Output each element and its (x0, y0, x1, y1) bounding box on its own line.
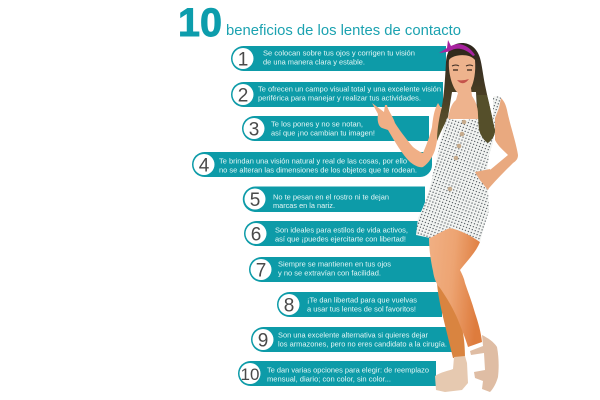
benefit 3 (242, 116, 429, 141)
polka dot romper (416, 96, 501, 242)
benefit 4: 4 (199, 156, 210, 176)
benefit 5: marcas en la nariz. (273, 201, 335, 210)
benefit 8: a usar tus lentes de sol favoritos! (307, 304, 416, 314)
benefit 5: No te pesan en el rostro ni te dejan (273, 192, 389, 202)
benefit 10 (238, 361, 436, 386)
benefit 9: 9 (258, 330, 268, 352)
back leg (437, 283, 465, 358)
benefit 7: Siempre se mantienen en tus ojos (278, 260, 391, 268)
benefit 4 (192, 152, 432, 177)
benefit 8: ¡Te dan libertad para que vuelvas (307, 296, 417, 304)
hair (437, 43, 495, 143)
benefit 2: periférica para manejar y realizar tus actividades. (258, 94, 421, 102)
benefit 3: 3 (249, 120, 259, 140)
front leg (429, 228, 482, 347)
face, neck and chest (448, 55, 479, 119)
benefit 4: no se alteran las dimensiones de los objetos que te rodean. (219, 166, 417, 174)
woman pointing at the list (372, 40, 518, 392)
benefit 6: así que ¡puedes ejercitarte con libertad! (275, 234, 406, 244)
buttons and belt (448, 120, 466, 191)
title (178, 1, 461, 45)
benefit 6 (244, 221, 431, 246)
benefit 2: Te ofrecen un campo visual total y una excelente visión (258, 84, 441, 94)
title: beneficios de los lentes de contacto (226, 22, 461, 39)
hair strands over dress (477, 95, 495, 143)
benefit 7 (249, 257, 436, 282)
benefit 2 (231, 82, 443, 107)
purple headband (439, 40, 475, 56)
benefit 1 (231, 46, 446, 71)
benefit 10: 10 (241, 365, 259, 384)
left shoe (435, 356, 468, 392)
benefit 1: de una manera clara y estable. (263, 58, 365, 66)
benefit 7: 7 (256, 260, 266, 282)
title: 10 (178, 1, 222, 45)
right arm (475, 97, 518, 190)
benefit 9 (251, 327, 453, 352)
eyes and smile (452, 65, 473, 83)
benefit 10: Te dan varias opciones para elegir: de reemplazo (267, 366, 429, 374)
benefit 2: 2 (238, 86, 248, 106)
benefit 9: Son una excelente alternativa si quieres dejar (278, 330, 429, 340)
pointing arm (372, 103, 445, 167)
benefit 5: 5 (250, 190, 260, 211)
benefit 8 (277, 292, 442, 317)
benefit 6: 6 (251, 224, 261, 246)
hand in pocket (475, 169, 494, 190)
benefit 4: Te brindan una visión natural y real de las cosas, por ello (219, 156, 407, 166)
benefit 9: los armazones, pero no eres candidato a la cirugía. (278, 340, 447, 348)
benefit 3: así que ¡no cambian tu imagen! (271, 128, 375, 138)
benefit 7: y no se extravían con facilidad. (278, 268, 381, 278)
right shoe (470, 335, 499, 392)
benefit 6: Son ideales para estilos de vida activos, (275, 226, 408, 234)
benefit 3: Te los pones y no se notan, (271, 120, 363, 128)
benefit 10: mensual, diario; con color, sin color... (267, 374, 391, 384)
benefit 1: Se colocan sobre tus ojos y corrigen tu visión (263, 48, 415, 58)
benefit 1: 1 (238, 50, 248, 70)
benefit 8: 8 (284, 296, 294, 316)
benefit 5 (243, 186, 425, 212)
